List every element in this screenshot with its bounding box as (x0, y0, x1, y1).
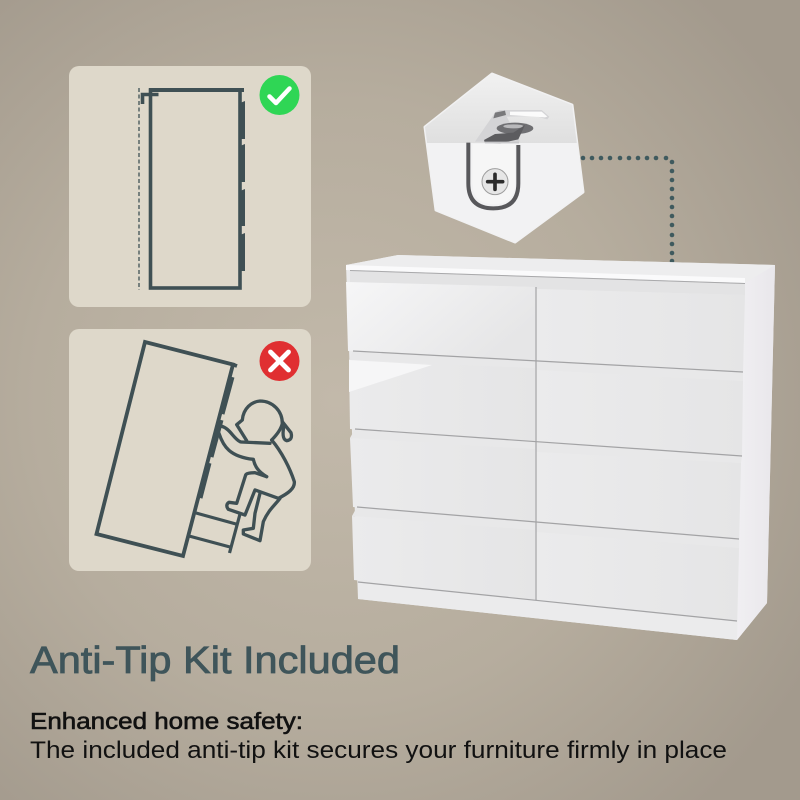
text block: subheading: Enhanced home safety: (30, 708, 303, 734)
rail row 3 (350, 429, 742, 463)
dresser side (737, 265, 775, 640)
icon: red cross (260, 341, 300, 381)
rail row 2 (349, 351, 743, 381)
dresser top (346, 255, 775, 283)
icon: green check (260, 75, 300, 115)
dresser body (346, 255, 775, 640)
panel: correct anchored dresser (69, 66, 311, 307)
dotted connector (581, 156, 674, 263)
text block: description: The included anti-tip kit secures your furniture firmly in place (30, 737, 727, 764)
dresser (346, 255, 775, 640)
drawer row 4 (352, 516, 739, 621)
rail row 4 (352, 507, 739, 548)
icon: metal bracket (468, 110, 549, 208)
icon: tipping dresser (96, 342, 240, 556)
callout: anti-tip bracket close-up (420, 70, 590, 248)
drawer row 2 (349, 360, 743, 456)
plinth (358, 582, 737, 640)
drawer gap lines (353, 287, 743, 621)
drawer row 3 (350, 438, 741, 539)
icon: dresser side view anchored to wall (139, 88, 245, 290)
icon: climbing child (219, 401, 294, 541)
panel: child climbing tipping dresser (69, 329, 311, 571)
top drawer rail (350, 270, 745, 295)
drawer row 1 (346, 282, 745, 372)
title: Anti-Tip Kit Included (30, 640, 400, 682)
